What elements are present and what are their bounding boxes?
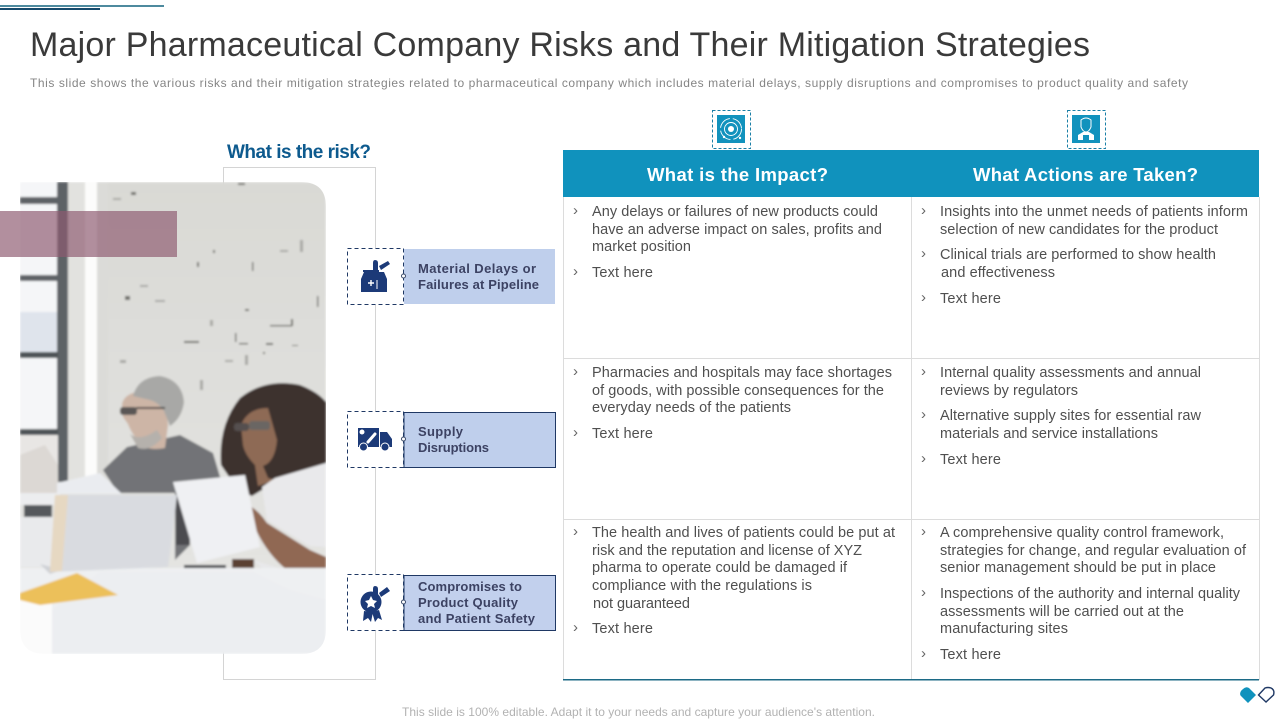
table [20, 566, 326, 608]
row 2 impact [573, 363, 892, 442]
photo: colleagues reviewing documents [20, 182, 326, 654]
table header [563, 150, 1259, 197]
row 2 actions: Text here [940, 452, 1001, 468]
row 1 impact [573, 202, 882, 281]
row 3 impact: › [573, 523, 578, 540]
row 1 impact: › [573, 263, 578, 280]
row 2 actions: reviews by regulators [940, 383, 1078, 399]
row 2 actions: › [921, 363, 926, 380]
icon: delivery truck [348, 412, 404, 468]
row 2 actions [921, 363, 1202, 468]
risk 1 label box [404, 249, 555, 304]
risk 3 label box [404, 576, 556, 630]
row 1 actions: › [921, 202, 926, 219]
row 1 actions: › [921, 245, 926, 262]
icon: quality badge [348, 574, 404, 630]
risk item 3: compromises to quality: Compromises to [418, 579, 522, 594]
risk item 2: supply disruptions: Supply [418, 424, 464, 439]
row 1 actions [921, 202, 1248, 307]
row 3 actions: › [921, 584, 926, 601]
row 3 impact: risk and the reputation and license of XYZ [592, 543, 862, 559]
risk item 2: supply disruptions [348, 412, 556, 468]
row 2 actions: materials and service installations [940, 426, 1158, 442]
icon: impact target [712, 110, 750, 148]
row 2 actions: › [921, 450, 926, 467]
heading: what is the risk: What is the risk? [227, 142, 371, 163]
row 1 impact: Text here [592, 265, 653, 281]
row 2 actions: Alternative supply sites for essential raw [940, 408, 1202, 424]
risk item 1: material delays [348, 248, 555, 304]
row 3 impact: Text here [592, 621, 653, 637]
lower window scene [20, 434, 60, 466]
row 3 impact: not guaranteed [593, 596, 690, 612]
row 2 impact: everyday needs of the patients [592, 400, 791, 416]
row 3 impact [573, 523, 895, 637]
row 2 impact: › [573, 363, 578, 380]
row 1 impact: › [573, 202, 578, 219]
row 1 actions: and effectiveness [941, 265, 1055, 281]
row 3 impact: › [573, 619, 578, 636]
row 3 actions: strategies for change, and regular evaluation of [940, 543, 1247, 559]
risk item 1: material delays: Failures at Pipeline [418, 277, 539, 292]
row 1 actions: Clinical trials are performed to show health [940, 247, 1216, 263]
row 3 actions: Inspections of the authority and internal quality [940, 586, 1241, 602]
row 3 impact: The health and lives of patients could be put at [592, 525, 895, 541]
row 3 actions: manufacturing sites [940, 621, 1068, 637]
risk item 1: material delays: Material Delays or [418, 261, 536, 276]
row 3 impact: pharma to operate could be damaged if [592, 560, 848, 576]
risk 2 label box [404, 412, 556, 468]
footer note: This slide is 100% editable. Adapt it to your needs and capture your audience's attention. [402, 705, 875, 719]
table header: What Actions are Taken? [973, 164, 1198, 185]
risk item 3: compromises to quality: and Patient Safety [418, 611, 536, 626]
table header: What is the Impact? [647, 164, 828, 185]
row 1 actions: › [921, 289, 926, 306]
row 2 impact: Pharmacies and hospitals may face shortages [592, 365, 892, 381]
row 3 actions: › [921, 523, 926, 540]
row 1 impact: have an adverse impact on sales, profits and [592, 222, 882, 238]
translucent pink band [0, 211, 177, 257]
row 3 actions: Text here [940, 647, 1001, 663]
icon: actions doctor [1068, 110, 1106, 148]
row 3 actions: A comprehensive quality control framework, [940, 525, 1224, 541]
row 1 impact: market position [592, 239, 691, 255]
row 1 impact: Any delays or failures of new products could [592, 204, 878, 220]
woman [221, 383, 326, 496]
row 1 actions: Insights into the unmet needs of patients inform [940, 204, 1248, 220]
icon: medicine box [348, 248, 404, 304]
row 2 actions: Internal quality assessments and annual [940, 365, 1201, 381]
subtitle: This slide shows the various risks and their mitigation strategies related to pharmaceutical company which includes material delays, supply disruptions and compromises to product quality and safety [30, 76, 1188, 90]
row 3 actions: senior management should be put in place [940, 560, 1216, 576]
documents and laptop [57, 473, 122, 494]
row 3 impact: compliance with the regulations is [592, 578, 812, 594]
row 2 actions: › [921, 406, 926, 423]
risk item 3: compromises to quality [348, 574, 556, 630]
row 3 actions: › [921, 645, 926, 662]
row 3 actions: assessments will be carried out at the [940, 604, 1184, 620]
man [103, 435, 224, 560]
row 3 actions [921, 523, 1247, 663]
table grid [563, 197, 1260, 680]
row 2 impact: › [573, 424, 578, 441]
row 2 impact: Text here [592, 426, 653, 442]
row 2 impact: of goods, with possible consequences for the [592, 383, 884, 399]
row 1 actions: selection of new candidates for the product [940, 222, 1218, 238]
row 1 actions: Text here [940, 291, 1001, 307]
top accent lines [0, 5, 164, 10]
icon: footer diamonds [1240, 687, 1274, 703]
comparison table [563, 150, 1260, 680]
risk item 3: compromises to quality: Product Quality [418, 595, 519, 610]
risk frame [224, 168, 376, 680]
risk item 2: supply disruptions: Disruptions [418, 440, 489, 455]
title: Major Pharmaceutical Company Risks and Their Mitigation Strategies [30, 26, 1090, 64]
